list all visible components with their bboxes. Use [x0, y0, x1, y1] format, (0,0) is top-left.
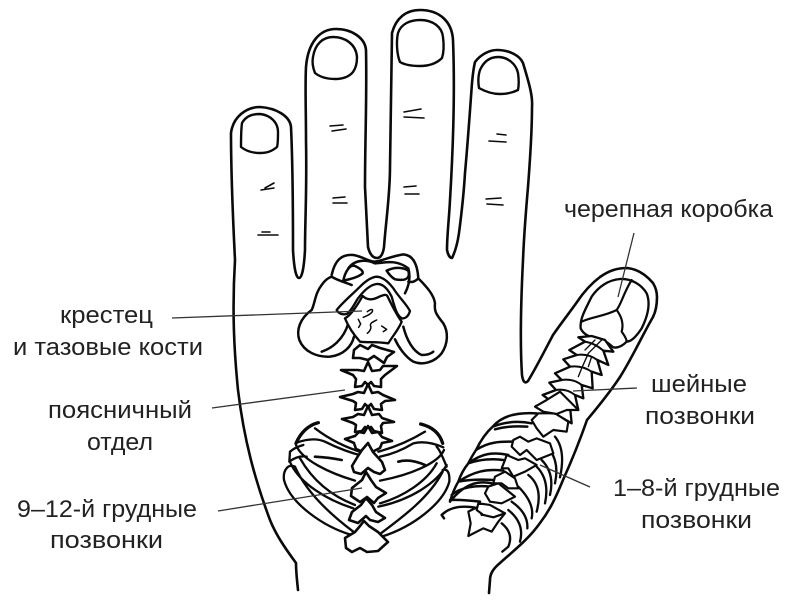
label: lumbar section: отдел	[87, 429, 153, 456]
label: lumbar section	[48, 397, 192, 456]
label: cervical: шейные	[651, 371, 747, 398]
label: lumbar section: поясничный	[48, 397, 192, 424]
leader: cervical	[573, 388, 637, 391]
pelvis and sacrum	[298, 254, 447, 363]
nail: little finger	[241, 114, 278, 153]
neck vertebra separators	[552, 342, 603, 407]
label: cervical	[645, 371, 755, 430]
vertebrae	[468, 392, 578, 536]
fingernails	[241, 20, 519, 153]
label: thoracic 1-8: 1–8-й грудные	[613, 475, 780, 502]
nail: middle finger	[397, 20, 444, 66]
right pelvic bone	[395, 278, 447, 363]
long outer ribs	[442, 413, 537, 518]
leader: lumbar	[212, 390, 345, 408]
label: thoracic 1-8: позвонки	[641, 507, 752, 534]
right opening	[387, 268, 409, 280]
label: cervical: позвонки	[645, 403, 755, 430]
label: thoracic 9-12: позвонки	[50, 527, 163, 554]
lumbar vertebrae	[340, 345, 397, 458]
skull and cervical spine	[536, 279, 649, 423]
label: thoracic 9-12	[17, 496, 197, 554]
finger creases	[258, 109, 506, 235]
rib cage	[284, 423, 449, 537]
thoracic vertebrae	[345, 443, 388, 552]
skull outline	[581, 279, 649, 348]
label: sacrum and pelvic bones	[13, 302, 203, 361]
leader lines	[172, 233, 637, 511]
nail: ring finger	[313, 37, 357, 79]
label: thoracic 9-12: 9–12-й грудные	[17, 496, 197, 523]
nail: index finger	[478, 57, 519, 94]
hand outline	[231, 10, 657, 593]
label: cranium: черепная коробка	[564, 196, 774, 223]
right ribs	[378, 424, 449, 537]
small inner ribs	[502, 437, 562, 552]
thumb thoracic spine	[442, 392, 578, 552]
skull sutures	[582, 280, 632, 342]
left opening	[343, 266, 363, 281]
left ribs	[284, 423, 365, 535]
sacrum body	[345, 295, 402, 343]
label: thoracic 1-8	[613, 475, 780, 534]
sacrum arch	[337, 277, 410, 318]
label: sacrum and pelvic bones: и тазовые кости	[13, 334, 203, 361]
label: sacrum and pelvic bones: крестец	[60, 302, 153, 329]
iliac crest	[332, 254, 418, 293]
neck vertebrae	[536, 336, 613, 423]
left pelvic bone	[298, 277, 354, 357]
leader: upper thoracic	[540, 465, 590, 487]
leader: lower thoracic	[218, 488, 362, 511]
leader: sacrum	[172, 311, 362, 318]
leader: cranium	[618, 233, 634, 297]
sacrum marks	[358, 310, 387, 333]
